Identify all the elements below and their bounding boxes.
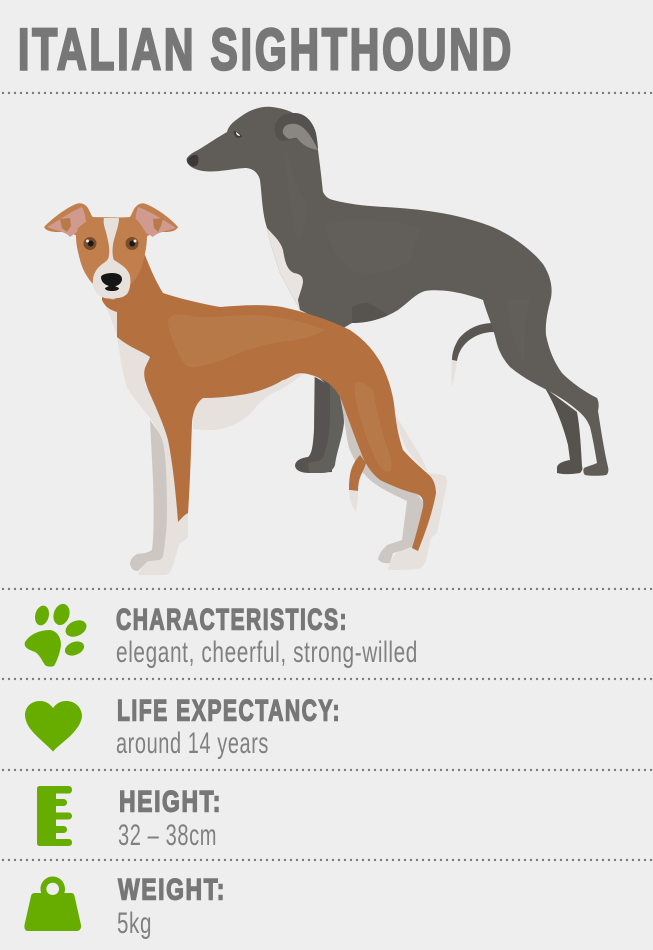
tail tip xyxy=(349,490,358,512)
label: height: HEIGHT: xyxy=(119,786,222,818)
tail tip xyxy=(451,360,457,387)
right eye xyxy=(126,237,138,250)
value: characteristics: elegant, cheerful, strong-willed xyxy=(116,636,418,669)
shoulder highlight xyxy=(168,315,325,367)
body and head xyxy=(187,107,608,476)
icon: heart xyxy=(25,701,82,752)
body xyxy=(102,255,436,551)
shading: neck and shoulder xyxy=(285,150,420,273)
right ear xyxy=(128,203,178,238)
face xyxy=(76,217,147,300)
left ear xyxy=(44,203,95,238)
chin xyxy=(108,297,117,299)
nose xyxy=(101,273,122,291)
haunch highlight xyxy=(355,382,391,472)
eye xyxy=(234,131,242,138)
belly fold xyxy=(352,303,388,323)
far front leg xyxy=(130,420,170,571)
blaze and muzzle xyxy=(93,218,130,299)
icon: paw xyxy=(25,602,89,667)
chest patch xyxy=(267,228,303,310)
value: life expectancy: around 14 years xyxy=(116,727,269,760)
far hind leg xyxy=(340,397,425,563)
icon: weight xyxy=(24,876,81,931)
illustration: orange and white sighthound xyxy=(44,203,447,575)
label: life expectancy: LIFE EXPECTANCY: xyxy=(117,694,341,728)
far hind leg xyxy=(545,388,582,474)
icon: ruler xyxy=(37,786,72,846)
head xyxy=(44,203,178,300)
label: weight: WEIGHT: xyxy=(118,874,226,906)
shading: haunch xyxy=(507,300,530,365)
tail xyxy=(452,323,494,361)
value: weight: 5kg xyxy=(117,907,152,940)
near front leg xyxy=(308,350,344,473)
chest and near front leg white xyxy=(105,305,188,575)
left eye xyxy=(84,237,96,250)
illustration: grey greyhound xyxy=(187,107,608,476)
nose xyxy=(187,155,198,166)
value: height: 32 – 38cm xyxy=(118,819,217,852)
near hind paw and white rear edge xyxy=(388,414,447,570)
belly underside xyxy=(193,360,325,430)
far front leg xyxy=(295,350,332,473)
label: characteristics: CHARACTERISTICS: xyxy=(116,604,348,636)
ear xyxy=(275,113,318,150)
tail xyxy=(349,455,366,491)
